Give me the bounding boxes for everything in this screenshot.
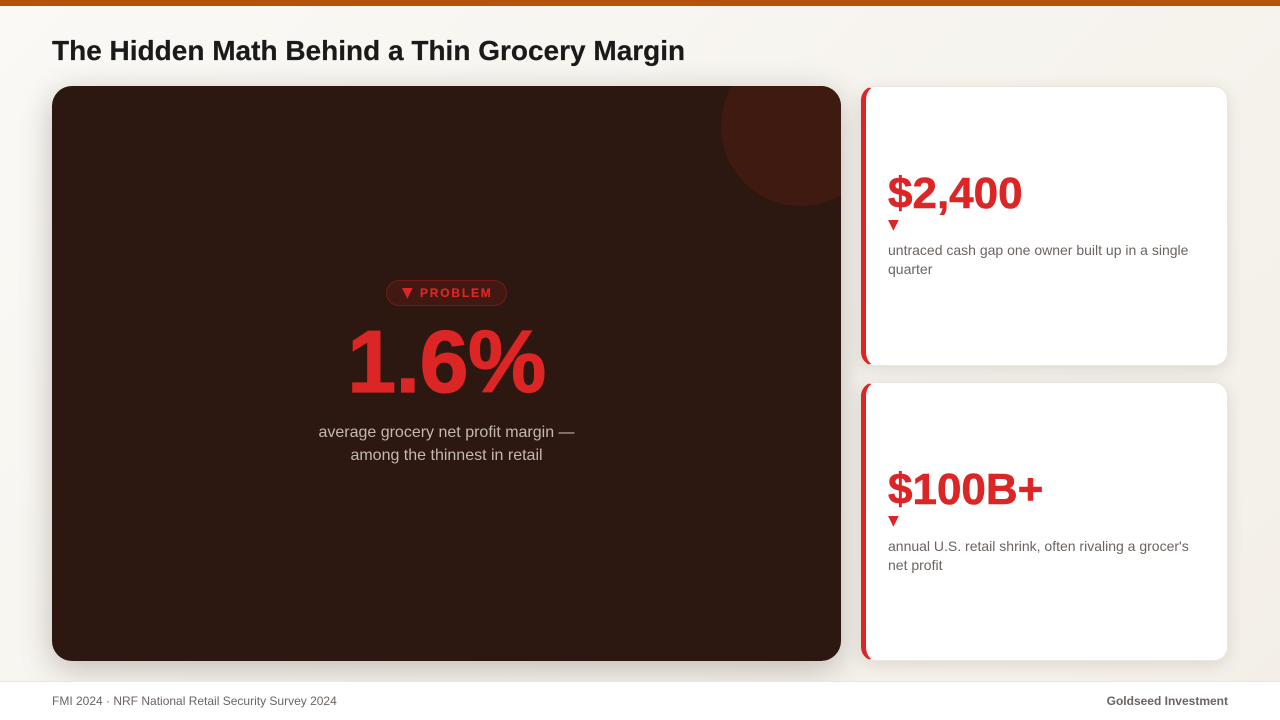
shrink value: $100B+ [888, 465, 1043, 514]
hero description [318, 424, 575, 464]
footer [0, 681, 1280, 720]
panel: hero problem stat [52, 86, 841, 661]
cash gap description: untraced cash gap one owner built up in a single quarter [888, 242, 1188, 277]
hero description: among the thinnest in retail [350, 447, 543, 464]
top accent bar [0, 0, 1280, 6]
hero description: average grocery net profit margin — [318, 424, 575, 441]
brand name: Goldseed Investment [1107, 694, 1228, 708]
badge label: PROBLEM [420, 286, 493, 300]
shrink arrow: ▼ [888, 513, 899, 529]
problem badge [386, 280, 507, 306]
panel: cash gap card [861, 86, 1228, 366]
big number: 1.6% [347, 312, 546, 411]
title: The Hidden Math Behind a Thin Grocery Margin [52, 35, 685, 66]
badge arrow: ▼ [402, 285, 413, 301]
cash gap arrow: ▼ [888, 217, 899, 233]
source note: FMI 2024 · NRF National Retail Security Survey 2024 [52, 694, 337, 708]
cash gap value: $2,400 [888, 169, 1023, 218]
decorative circle [721, 46, 881, 206]
panel: retail shrink card [861, 382, 1228, 661]
shrink description: annual U.S. retail shrink, often rivaling a grocer's net profit [888, 538, 1189, 573]
